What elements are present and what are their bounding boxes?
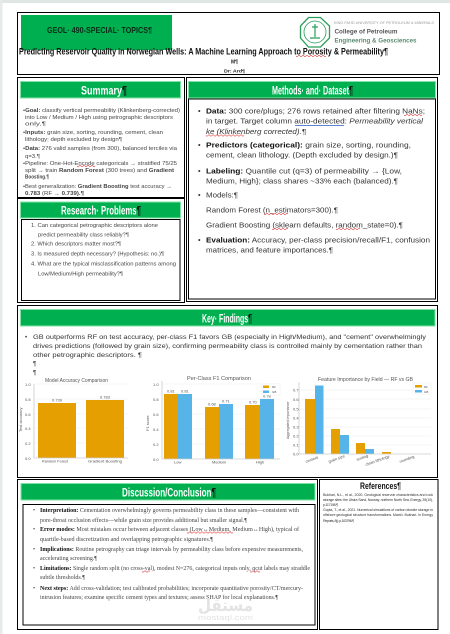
methods text: cement, clean lithology. (Depth excluded by design.)¶ (206, 150, 398, 160)
author: Dr: Ard¶ (224, 68, 245, 74)
course banner: GEOL· 490-SPECIAL· TOPICS¶ (47, 25, 152, 35)
chart: model accuracy comparison: 0.739 (52, 398, 63, 402)
methods text: Labeling: Quantile cut (q=3) of permeability → {Low, (206, 166, 402, 176)
chart: feature importance by field: 0.4 (293, 416, 299, 420)
heading: key findings (20, 310, 435, 326)
discussion text: • (33, 527, 35, 533)
chart: per-class F1 comparison: 0.81 (181, 388, 190, 394)
chart: per-class F1 comparison: High (256, 460, 264, 464)
watermark (198, 596, 253, 622)
heading: references: References¶ (360, 481, 401, 491)
chart: model accuracy comparison: 0.8 (25, 397, 31, 402)
chart: feature importance by field: 0.7 (293, 388, 299, 392)
chart: feature importance by field: 0.5 (293, 406, 299, 412)
reference list: Reports, 8(): p.103796.¶ (323, 519, 354, 523)
methods text: in target. Target column auto-detected: Permeability vertical (206, 116, 423, 126)
summary text: Boosting.¶ (25, 174, 49, 180)
author (224, 60, 245, 74)
summary text: •Goal: classify vertical permeability (Klinkenberg-corrected) (23, 108, 180, 114)
research questions: 2. Which descriptors matter most?¶ (31, 242, 121, 248)
summary text: q=3.¶ (25, 154, 40, 160)
chart: feature importance by field: 0.2 (293, 434, 299, 438)
summary text: •Pipeline: One-Hot-Encode categoricals → stratified 75/25 (23, 161, 177, 167)
panel: key findings (18, 306, 438, 478)
research questions: Low/Medium/High permeability?¶ (38, 272, 123, 278)
discussion text: Interpretation: Cementation overwhelmingly governs permeability class in these samples—consistent with (40, 508, 299, 514)
methods text: • (198, 166, 201, 176)
chart: feature importance by field: Feature Importance by Field — RF vs GB (318, 377, 414, 383)
summary text: •Best generalization: Gradient Boosting test accuracy → (23, 184, 172, 190)
chart: per-class F1 comparison: 0.68 (208, 402, 217, 406)
chart: model accuracy comparison: 0.2 (25, 441, 31, 446)
chart: per-class F1 comparison: 0.0 (153, 457, 159, 462)
college name: Engineering & Geosciences (334, 38, 417, 44)
summary text: only.¶ (25, 122, 46, 128)
reference list: p.117198.¶ (323, 503, 338, 507)
research questions: predict permeability class reliably?¶ (38, 232, 129, 238)
discussion text: Next steps: Add cross-validation; test calibrated probabilities; incorporate quantitative porosity/CT/mercury- (40, 586, 303, 592)
chart: model accuracy comparison: 0.0 (25, 456, 31, 461)
discussion text: Error modes: Most mistakes occur between adjacent classes (Low↔Medium, Medium↔High), typical of (40, 526, 299, 533)
methods text: Gradient Boosting (sklearn defaults, random_state=0).¶ (206, 220, 403, 230)
chart: model accuracy comparison (18, 378, 128, 464)
methods text: • (198, 190, 201, 200)
heading: research problems: Research· Problems¶ (61, 204, 141, 218)
panel: methods and dataset (186, 78, 438, 302)
reference list: storage sites: the Utsira Sand, Norway, northern North Sea. Energy, 39(10), (323, 498, 433, 502)
methods text: Evaluation: Accuracy, per-class precision/recall/F1, confusion (206, 236, 430, 244)
chart: model accuracy comparison: 0.6 (25, 412, 31, 417)
discussion text: accelerating screening.¶ (40, 556, 97, 562)
reference list: offshore geological structure transformations. Marsh. Bukhari. In Energy (323, 513, 433, 517)
chart: per-class F1 comparison: 0.2 (153, 442, 159, 447)
chart: per-class F1 comparison: 0.4 (153, 427, 159, 432)
panel: discussion and conclusion (18, 480, 318, 630)
chart: per-class F1 comparison: Low (174, 460, 181, 464)
course banner (21, 15, 172, 50)
summary text: lithology; depth excluded by design¶ (25, 137, 122, 143)
methods text: Predictors (categorical): grain size, sorting, rounding, (206, 140, 411, 150)
reference list (323, 493, 433, 523)
discussion text: Limitations: Single random split (no cross-val), modest N=276, categorical inputs only, qcut labels may straddle (40, 565, 310, 572)
chart: model accuracy comparison: 1.0 (25, 382, 31, 387)
discussion text (23, 504, 315, 625)
methods text (188, 99, 436, 299)
chart: model accuracy comparison: 0.4 (25, 426, 31, 431)
methods text: Data: 300 core/plugs; 276 rows retained after filtering NaNs; (206, 106, 425, 116)
findings text: ¶ (33, 362, 36, 368)
chart: per-class F1 comparison: Medium (212, 460, 227, 464)
chart: per-class F1 comparison: 0.71 (222, 398, 231, 404)
findings text: drives predictions (followed by grain size), confirming permeability class is controlled mainly by cementation rather than (33, 344, 422, 350)
summary text: 0.783 (RF → 0.739).¶ (25, 191, 84, 197)
heading: summary: Summary¶ (81, 84, 127, 98)
chart: per-class F1 comparison: GB (272, 390, 276, 394)
chart: feature importance by field: rounding (399, 454, 415, 464)
chart: feature importance by field: grain size (328, 453, 346, 464)
methods text: • (198, 236, 201, 244)
college name (334, 21, 435, 44)
chart: per-class F1 comparison: RF (272, 385, 276, 389)
reference list: Bukhari, N.L., et al., 2020. Geological reservoir characteristics and rock (323, 493, 433, 497)
findings text (25, 335, 426, 376)
summary text: into Low / Medium / High using petrographic descriptors (25, 115, 173, 121)
chart: feature importance by field: Aggregated importance (286, 402, 290, 439)
chart: feature importance by field: sorting (356, 453, 369, 462)
chart: per-class F1 comparison (145, 376, 280, 464)
chart: per-class F1 comparison: F1 score (145, 415, 150, 431)
findings text: other petrographic descriptors. ¶ (33, 353, 142, 359)
panel: research problems (18, 198, 184, 302)
discussion text: • (33, 586, 35, 592)
chart: model accuracy comparison: Random Forest (42, 458, 69, 464)
chart: feature importance by field (286, 377, 431, 467)
panel: references (320, 480, 438, 630)
research questions: 3. Is measured depth necessary? (Hypothesis: no.)¶ (31, 252, 164, 258)
chart: feature importance by field: 0.1 (293, 442, 299, 448)
research questions: 1. Can categorical petrographic descriptors alone (31, 223, 158, 229)
discussion text: • (33, 566, 35, 572)
heading: discussion and conclusion (21, 484, 315, 500)
discussion text: intrusion features; examine specific cement types and textures; assess SHAP for local explanations.¶ (40, 594, 278, 601)
methods text: • (198, 140, 201, 150)
reference list: Gupta, T., et al., 2021. Numerical simulations of carbon dioxide storage in (323, 508, 433, 512)
author: M¶ (231, 60, 238, 66)
heading: methods and dataset: Methods· and· Dataset¶ (272, 84, 353, 98)
methods text: matrices, and feature importances.¶ (206, 246, 333, 254)
findings text: • (25, 335, 27, 341)
heading: discussion and conclusion: Discussion/Conclusion¶ (122, 486, 216, 500)
chart: per-class F1 comparison: Per-Class F1 Comparison (187, 376, 251, 382)
chart: per-class F1 comparison: 0.6 (153, 412, 159, 417)
discussion text: Implications: Routine petrography can triage intervals by permeability class before expensive measurements, (40, 546, 303, 553)
chart: feature importance by field: 0.0 (293, 452, 299, 456)
chart: feature importance by field: 0.3 (293, 424, 299, 430)
findings text: GB outperforms RF on test accuracy, per-class F1 favors GB (especially in High/Medium), and "cement" overwhelmingly (33, 335, 426, 341)
chart: model accuracy comparison: Test accuracy (18, 408, 23, 432)
chart: feature importance by field: 0.6 (293, 397, 299, 402)
chart: feature importance by field: clean lithology (365, 454, 390, 467)
heading: key findings: Key· Findings¶ (202, 312, 252, 326)
discussion text: subtle thresholds.¶ (40, 575, 85, 581)
summary text: split → train Random Forest (300 trees) and Gradient (25, 168, 174, 174)
chart: model accuracy comparison: Model Accuracy Comparison (45, 378, 108, 384)
discussion text: quartile-based discretization and overlapping petrographic signatures.¶ (40, 537, 213, 543)
header panel (18, 12, 440, 74)
college name: College of Petroleum (334, 28, 398, 36)
summary text: •Inputs: grain size, sorting, rounding, cement, clean (23, 130, 163, 136)
chart: feature importance by field: GB (424, 390, 428, 394)
findings text: ¶ (33, 370, 36, 376)
watermark: مستقل (198, 596, 253, 615)
chart: model accuracy comparison: 0.783 (100, 394, 111, 400)
college name: KING FAHD UNIVERSITY OF PETROLEUM & MINERALS (334, 21, 435, 25)
heading: methods and dataset (188, 82, 436, 98)
panel: summary (18, 78, 184, 198)
summary text (23, 108, 180, 197)
methods text: ke (Klinkenberg corrected).¶ (206, 127, 306, 136)
discussion text: • (33, 508, 35, 514)
methods text: Random Forest (n_estimators=300).¶ (206, 206, 338, 214)
chart: per-class F1 comparison: 0.81 (167, 388, 176, 394)
chart: feature importance by field: cement (305, 454, 320, 464)
methods text: Medium, High}; class shares ~33% each (balanced).¶ (206, 176, 398, 186)
summary text: •Data: 276 valid samples (from 300), balanced terciles via (23, 146, 178, 152)
heading: research problems (20, 202, 180, 218)
discussion text: • (33, 547, 35, 553)
chart: model accuracy comparison: Gradient Boosting (88, 458, 122, 464)
chart: per-class F1 comparison: 0.78 (263, 394, 272, 398)
chart: per-class F1 comparison: 0.70 (249, 400, 258, 404)
watermark: mostaql.com (198, 613, 253, 622)
icon: university logo (300, 18, 330, 47)
chart: per-class F1 comparison: 0.8 (153, 397, 159, 402)
research questions (22, 220, 180, 300)
chart: feature importance by field: RF (424, 385, 428, 389)
heading: summary (20, 82, 180, 98)
methods text: Models:¶ (206, 190, 238, 200)
chart: per-class F1 comparison: 1.0 (153, 382, 159, 387)
research questions: 4. What are the typical misclassification patterns among (31, 262, 176, 268)
discussion text: pore-throat occlusion effects—while grain size provides additional but smaller signal.¶ (40, 517, 247, 524)
methods text: • (198, 106, 201, 116)
